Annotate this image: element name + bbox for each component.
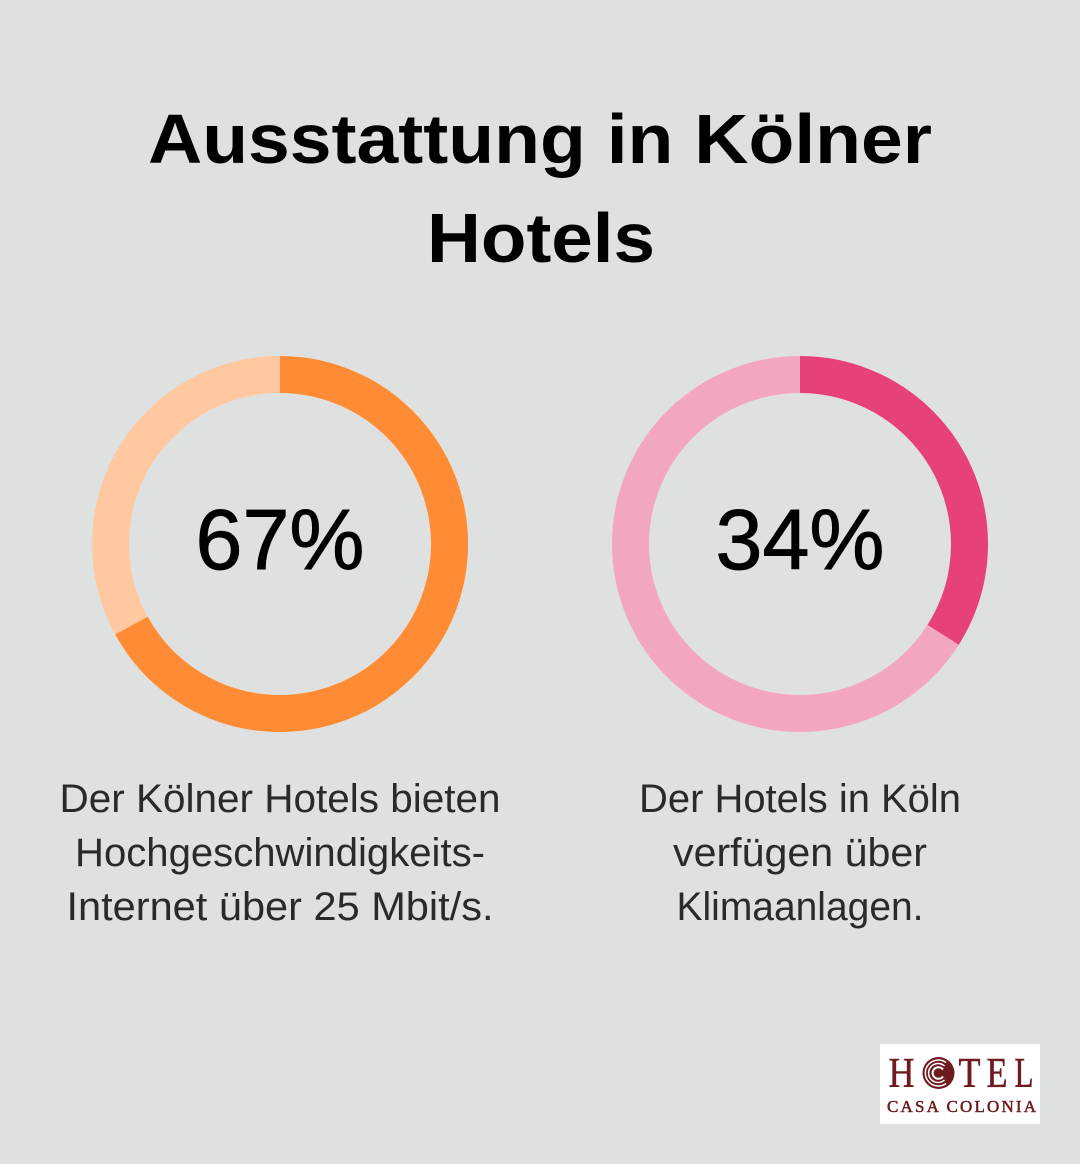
panel: 67% internet statistic: [60, 374, 500, 929]
logo wordmark: T: [958, 1051, 980, 1097]
value: 34%: 34%: [716, 493, 884, 588]
panel: 34% air conditioning statistic: [630, 374, 970, 929]
description: internet: Internet über 25 Mbit/s.: [66, 885, 494, 929]
logo wordmark: [888, 1051, 1034, 1097]
logo: Hotel Casa Colonia: [880, 1044, 1040, 1124]
description: internet: Hochgeschwindigkeits-: [75, 831, 485, 875]
description: air conditioning: [639, 777, 961, 929]
donut chart: 34%: [630, 374, 970, 714]
value: 67%: 67%: [196, 493, 364, 588]
description: air conditioning: Klimaanlagen.: [676, 885, 924, 929]
donut chart: 67%: [110, 374, 450, 714]
title: Hotels: [427, 199, 655, 277]
description: air conditioning: verfügen über: [673, 831, 927, 875]
description: internet: [60, 777, 500, 929]
logo wordmark: E: [986, 1051, 1008, 1097]
description: air conditioning: Der Hotels in Köln: [639, 777, 961, 821]
description: internet: Der Kölner Hotels bieten: [60, 777, 500, 821]
title: Ausstattung in Kölner: [148, 100, 932, 178]
icon: spiral letter O: [922, 1057, 954, 1089]
logo tagline: CASA COLONIA: [887, 1097, 1037, 1116]
title: [148, 100, 932, 277]
logo wordmark: H: [888, 1051, 914, 1097]
logo wordmark: L: [1014, 1051, 1034, 1097]
